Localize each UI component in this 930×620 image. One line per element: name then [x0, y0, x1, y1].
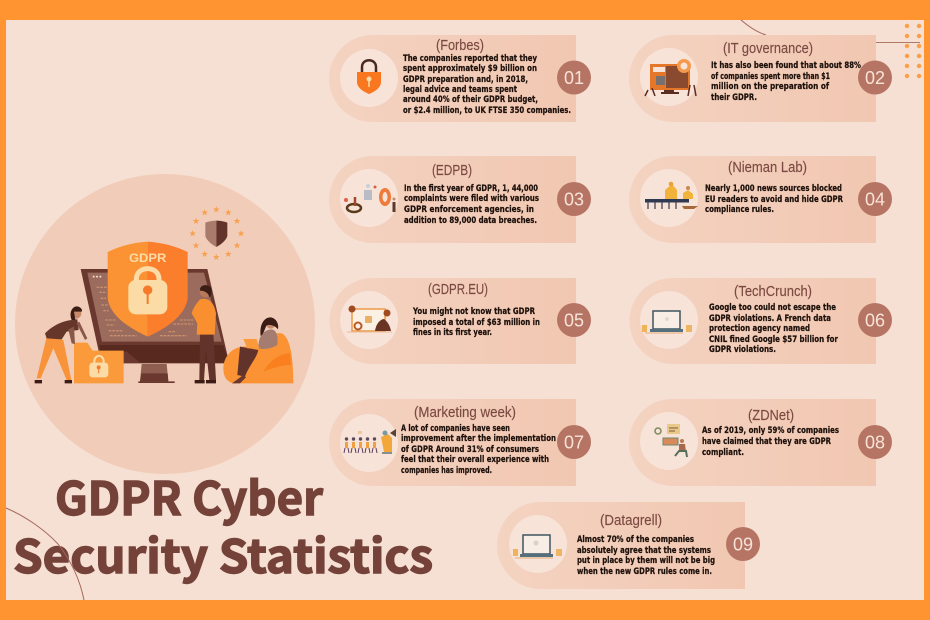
icon: people at a table — [645, 182, 698, 209]
icon: crowd with megaphone — [344, 429, 396, 453]
hero circle background — [15, 174, 315, 474]
panel: 04 Nieman Lab: (Nieman Lab) — [728, 159, 807, 176]
panel: 07 Marketing week: companies has improved. — [401, 466, 492, 476]
panel: 08 ZDNet: have claimed that they are GDPR — [702, 437, 831, 447]
icon: woman on bean bag — [223, 317, 293, 383]
panel: 09 Datagrell: (Datagrell) — [600, 512, 662, 529]
panel: 01 Forbes: The companies reported that they — [403, 54, 537, 64]
panel: 02 IT governance: (IT governance) — [723, 40, 813, 57]
panel: 03 EDPB: addition to 89,000 data breaches. — [404, 216, 537, 226]
panel: 06 TechCrunch: GDPR violations. — [709, 345, 776, 355]
panel: 01 Forbes: legal advice and teams spent — [403, 85, 518, 95]
panel: 09 Datagrell: Almost 70% of the companies — [577, 535, 694, 545]
icon: laptop — [513, 535, 562, 558]
panel: 08 ZDNet: As of 2019, only 59% of companies — [702, 426, 839, 436]
panel: 07 Marketing week — [329, 399, 591, 486]
icon: EU stars and small shield: ★ — [201, 209, 209, 219]
icon: EU stars and small shield: ★ — [224, 250, 232, 260]
panel: 02 IT governance: 02 — [865, 68, 885, 88]
icon: person working at a screen — [655, 424, 687, 457]
panel: 01 Forbes: or $2.4 million, to UK FTSE 350 companies. — [403, 106, 571, 116]
panel: 09 Datagrell: put in place by them will not be big — [577, 556, 715, 566]
panel: 03 EDPB: complaints were filed with various — [404, 194, 539, 204]
panel: 04 Nieman Lab: Nearly 1,000 news sources blocked — [705, 184, 842, 194]
icon: EU stars and small shield: ★ — [233, 242, 241, 252]
panel: 03 EDPB: 03 — [564, 190, 584, 210]
icon: EU stars and small shield — [189, 206, 245, 263]
panel: 05 GDPR.EU: (GDPR.EU) — [428, 281, 488, 298]
icon: EU stars and small shield: ★ — [201, 250, 209, 260]
icon: standing man — [192, 285, 216, 383]
panel: 06 TechCrunch: CNIL fined Google $57 billion for — [709, 335, 838, 345]
panel: 06 TechCrunch: Google too could not escape the — [709, 303, 836, 313]
panel: 05 GDPR.EU: fines in its first year. — [413, 328, 492, 338]
panel: 07 Marketing week: of GDPR Around 31% of consumers — [401, 445, 539, 455]
panel: 02 IT governance: of companies spent more than $1 — [711, 72, 830, 82]
panel: 07 Marketing week: 07 — [564, 432, 584, 452]
title: Security Statistics — [13, 521, 433, 587]
panel: 06 TechCrunch: (TechCrunch) — [734, 283, 812, 300]
panel: 07 Marketing week: A lot of companies have seen — [401, 424, 510, 434]
panel: 08 ZDNet: compliant. — [702, 448, 744, 458]
panel: 04 Nieman Lab: compliance rules. — [705, 205, 774, 215]
panel: 09 Datagrell: 09 — [733, 534, 753, 554]
panel: 07 Marketing week: feel that their overall experience with — [401, 455, 549, 465]
icon: EU stars and small shield: ★ — [233, 217, 241, 227]
panel: 06 TechCrunch: GDPR violations. A French data — [709, 314, 831, 324]
decorative bottom-left arc — [6, 508, 84, 600]
title — [13, 463, 433, 587]
panel: 01 Forbes — [329, 35, 591, 122]
panel: 05 GDPR.EU — [329, 278, 591, 364]
panel: 08 ZDNet: 08 — [865, 432, 885, 452]
panel: 05 GDPR.EU: imposed a total of $63 million in — [413, 318, 540, 328]
icon: EU stars and small shield: ★ — [192, 242, 200, 252]
icon: EU stars and small shield: ★ — [189, 230, 197, 240]
panel: 03 EDPB: GDPR enforcement agencies, in — [404, 205, 534, 215]
icon: EU stars and small shield: ★ — [224, 209, 232, 219]
panel: 03 EDPB: (EDPB) — [432, 162, 472, 179]
panel: 02 IT governance: It has also been found that about 88% — [711, 61, 861, 71]
icon: woman with folder — [35, 306, 124, 383]
panel: 06 TechCrunch: 06 — [865, 310, 885, 330]
icon: EU stars and small shield: ★ — [237, 230, 245, 240]
icon: monitor — [81, 269, 229, 383]
icon: monitor with at sign — [645, 59, 696, 96]
icon: lock on a web page — [347, 306, 392, 332]
panel: 08 ZDNet — [629, 399, 892, 486]
panel: 07 Marketing week: (Marketing week) — [414, 404, 516, 421]
panel: 03 EDPB: In the first year of GDPR, 1, 44,000 — [404, 184, 538, 194]
panel: 04 Nieman Lab: 04 — [865, 190, 885, 210]
icon: EU stars and small shield: ★ — [212, 206, 220, 216]
panel: 04 Nieman Lab — [629, 156, 892, 243]
panel: 01 Forbes: spent approximately $9 billion on — [403, 64, 537, 74]
icon: GDPR shield with padlock — [108, 242, 188, 337]
panel: 06 TechCrunch: protection agency named — [709, 324, 810, 334]
panel: 09 Datagrell: when the new GDPR rules come in. — [577, 567, 712, 577]
panel: 08 ZDNet: (ZDNet) — [748, 407, 794, 424]
panel: 07 Marketing week: improvement after the implementation — [401, 434, 556, 444]
title: GDPR Cyber — [55, 463, 324, 529]
decorative top-right arc, line and dots — [741, 20, 921, 78]
panel: 06 TechCrunch — [630, 278, 892, 364]
icon: GDPR shield with padlock: GDPR — [129, 252, 167, 265]
panel: 02 IT governance: their GDPR. — [711, 93, 757, 103]
panel: 03 EDPB — [329, 156, 591, 243]
icon: padlock shield — [357, 60, 381, 94]
icon: EU stars and small shield: ★ — [192, 217, 200, 227]
panel: 04 Nieman Lab: EU readers to avoid and hide GDPR — [705, 195, 843, 205]
panel: 05 GDPR.EU: You might not know that GDPR — [412, 307, 535, 317]
panel: 02 IT governance: million on the preparation of — [711, 82, 829, 92]
panel: 01 Forbes: around 40% of their GDPR budget, — [403, 95, 538, 105]
panel: 01 Forbes: GDPR preparation and, in 2018, — [403, 75, 528, 85]
panel: 01 Forbes: (Forbes) — [436, 37, 484, 54]
icon: laptop — [642, 311, 692, 333]
icon: people with shield — [344, 184, 396, 212]
panel: 09 Datagrell — [497, 502, 760, 589]
hero illustration: GDPR shield, monitor and people — [35, 206, 293, 383]
panel: 09 Datagrell: absolutely agree that the systems — [577, 546, 711, 556]
panel: 05 GDPR.EU: 05 — [564, 310, 584, 330]
icon: EU stars and small shield: ★ — [212, 253, 220, 263]
panel: 02 IT governance — [629, 35, 892, 122]
panel: 01 Forbes: 01 — [564, 68, 584, 88]
